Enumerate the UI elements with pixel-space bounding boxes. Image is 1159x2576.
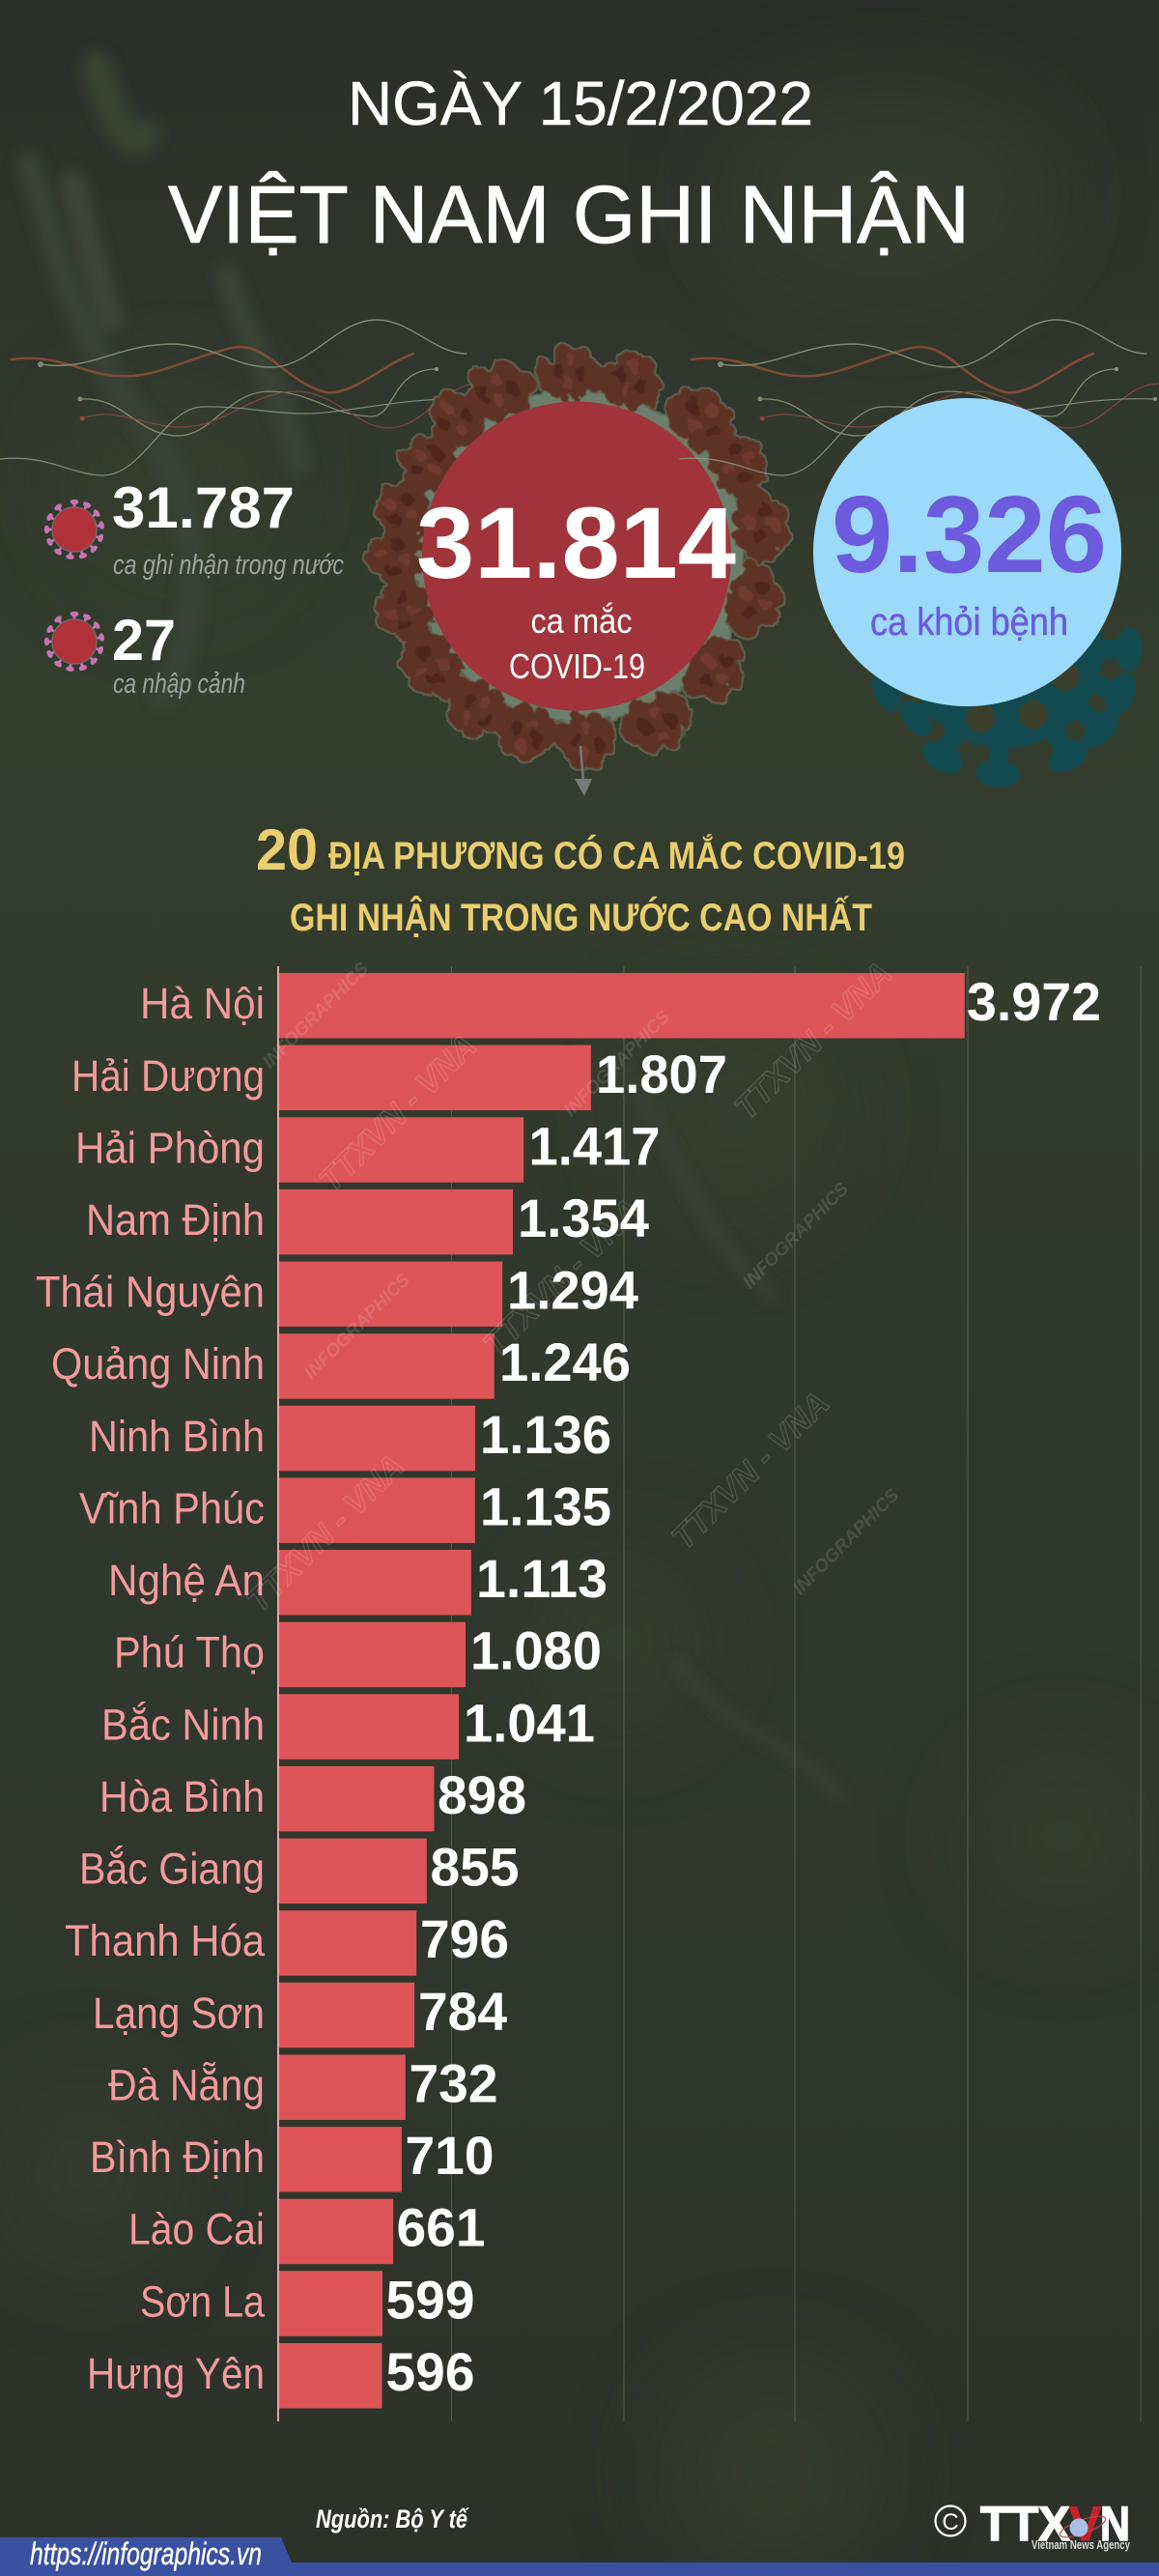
- row: Bắc Ninh: Bắc Ninh: [101, 1700, 265, 1749]
- row: Lào Cai: Lào Cai: [128, 2205, 265, 2254]
- row: Bình Định: Bình Định: [90, 2132, 265, 2182]
- icon: small virus: [44, 500, 105, 560]
- row: Phú Thọ: Phú Thọ: [114, 1628, 265, 1677]
- watermarks: TTXVN - VNA: [312, 1027, 484, 1199]
- row: Bình Định: 710: [406, 2125, 495, 2186]
- row: Hòa Bình: [99, 1764, 526, 1831]
- illustration: coronavirus: [366, 343, 795, 770]
- watermarks: INFOGRAPHICS: [560, 1007, 674, 1121]
- row: Hưng Yên: Hưng Yên: [87, 2349, 265, 2398]
- row: Lạng Sơn: [93, 1981, 507, 2047]
- row: Phú Thọ: [114, 1620, 602, 1687]
- watermarks: TTXVN - VNA: [727, 955, 899, 1127]
- row: Thanh Hóa: [65, 1908, 509, 1976]
- row: Quảng Ninh: [51, 1331, 631, 1399]
- row: Hòa Bình: 898: [438, 1764, 526, 1825]
- stat: domestic cases: [44, 475, 344, 581]
- row: Lào Cai: [128, 2197, 485, 2264]
- red circle: total cases: 31.814: [416, 487, 736, 600]
- watermarks: INFOGRAPHICS: [739, 1179, 853, 1293]
- row: Bắc Giang: Bắc Giang: [79, 1845, 265, 1894]
- red circle: total cases: [416, 402, 736, 711]
- row: Nam Định: [86, 1188, 649, 1254]
- row: Hải Dương: Hải Dương: [71, 1051, 265, 1101]
- row: Nghệ An: Nghệ An: [108, 1556, 265, 1605]
- chart heading: 20: [256, 817, 318, 882]
- title: date: NGÀY 15/2/2022: [348, 69, 813, 138]
- row: Bắc Ninh: 1.041: [464, 1692, 595, 1753]
- row: Hà Nội: 3.972: [967, 971, 1101, 1032]
- stat: imported cases: 27: [112, 608, 176, 673]
- row: Vĩnh Phúc: [79, 1475, 611, 1543]
- row: Hải Phòng: Hải Phòng: [75, 1123, 265, 1173]
- row: Phú Thọ: 1.080: [470, 1620, 602, 1681]
- logo: TTXVN: N: [1100, 2497, 1130, 2551]
- row: Ninh Bình: Ninh Bình: [89, 1412, 265, 1461]
- row: Vĩnh Phúc: 1.135: [480, 1475, 611, 1536]
- row: Sơn La: Sơn La: [140, 2276, 266, 2326]
- watermarks: TTXVN - VNA: [664, 1385, 836, 1557]
- row: Hải Phòng: [75, 1115, 661, 1183]
- row: Hưng Yên: [87, 2341, 475, 2408]
- blue circle: recovered: 9.326: [832, 473, 1107, 595]
- blue circle: recovered: ca khỏi bệnh: [870, 601, 1068, 644]
- stat: imported cases: [44, 608, 245, 700]
- decorative waves right: [680, 320, 1159, 475]
- row: Bình Định: [90, 2125, 495, 2192]
- watermarks: TTXVN - VNA: [240, 1447, 411, 1619]
- row: Thái Nguyên: [36, 1260, 638, 1327]
- row: Thanh Hóa: 796: [420, 1908, 509, 1969]
- logo: TTXVN: TTX: [980, 2497, 1070, 2551]
- icon: teal virus: [866, 551, 1143, 788]
- row: Hải Phòng: 1.417: [529, 1115, 661, 1176]
- blue circle: recovered: [813, 398, 1121, 706]
- row: Bắc Giang: 855: [431, 1837, 520, 1898]
- row: Hưng Yên: 596: [386, 2341, 475, 2402]
- row: Hải Dương: [71, 1044, 727, 1110]
- logo: TTXVN: Vietnam News Agency: [1032, 2538, 1130, 2552]
- row: Ninh Bình: [89, 1404, 611, 1471]
- watermarks: INFOGRAPHICS: [789, 1485, 903, 1599]
- row: Hà Nội: [140, 971, 1101, 1038]
- row: Đà Nẵng: 732: [410, 2052, 498, 2114]
- footer band with URL: [0, 2536, 1159, 2576]
- watermarks: [240, 955, 903, 1619]
- row: Sơn La: [140, 2269, 475, 2336]
- row: Bắc Ninh: [101, 1692, 595, 1760]
- logo: TTXVN: [935, 2497, 1130, 2552]
- row: Nam Định: 1.354: [518, 1188, 649, 1248]
- row: Nghệ An: [108, 1548, 608, 1616]
- stat: domestic cases: 31.787: [112, 475, 295, 540]
- axis line: [277, 966, 279, 2421]
- row: Thái Nguyên: 1.294: [507, 1260, 638, 1320]
- row: Thanh Hóa: Thanh Hóa: [65, 1916, 266, 1965]
- chart heading: [256, 817, 905, 939]
- chart heading: ĐỊA PHƯƠNG CÓ CA MẮC COVID-19: [328, 833, 905, 877]
- watermarks: INFOGRAPHICS: [300, 1270, 414, 1384]
- title: Việt Nam ghi nhận: VIỆT NAM GHI NHẬN: [168, 169, 970, 260]
- watermarks: INFOGRAPHICS: [259, 959, 373, 1073]
- row: Hòa Bình: Hòa Bình: [99, 1772, 265, 1821]
- row: Hải Dương: 1.807: [596, 1044, 727, 1104]
- row: Đà Nẵng: [108, 2052, 498, 2120]
- logo: TTXVN: C: [942, 2509, 959, 2535]
- row: Bắc Giang: [79, 1837, 520, 1903]
- logo: TTXVN: V: [1069, 2497, 1102, 2551]
- row: Quảng Ninh: Quảng Ninh: [51, 1339, 265, 1388]
- chart heading: GHI NHẬN TRONG NƯỚC CAO NHẤT: [290, 895, 872, 939]
- row: Vĩnh Phúc: Vĩnh Phúc: [79, 1483, 265, 1532]
- row: Sơn La: 599: [386, 2269, 475, 2330]
- row: Thái Nguyên: Thái Nguyên: [36, 1268, 265, 1316]
- row: Nam Định: Nam Định: [86, 1195, 265, 1245]
- icon: small virus: [44, 612, 105, 673]
- row: Lạng Sơn: Lạng Sơn: [93, 1989, 265, 2038]
- row: Lào Cai: 661: [396, 2197, 485, 2258]
- decorative waves left: [0, 320, 480, 475]
- footer band with URL: https://infographics.vn: [30, 2536, 262, 2571]
- row: Quảng Ninh: 1.246: [499, 1331, 631, 1392]
- row: Nghệ An: 1.113: [476, 1548, 608, 1609]
- red circle: total cases: COVID-19: [509, 646, 645, 686]
- stat: imported cases: ca nhập cảnh: [113, 669, 245, 700]
- source: Nguồn: Bộ Y tế: [316, 2504, 469, 2533]
- stat: domestic cases: ca ghi nhận trong nước: [113, 550, 344, 581]
- row: Đà Nẵng: Đà Nẵng: [108, 2060, 265, 2110]
- red circle: total cases: ca mắc: [531, 601, 632, 641]
- bar chart: [36, 966, 1141, 2421]
- row: Hà Nội: Hà Nội: [140, 979, 265, 1028]
- arrow down: [575, 746, 592, 796]
- row: Ninh Bình: 1.136: [480, 1404, 611, 1465]
- row: Lạng Sơn: 784: [418, 1981, 507, 2042]
- watermarks: TTXVN - VNA: [476, 1191, 648, 1363]
